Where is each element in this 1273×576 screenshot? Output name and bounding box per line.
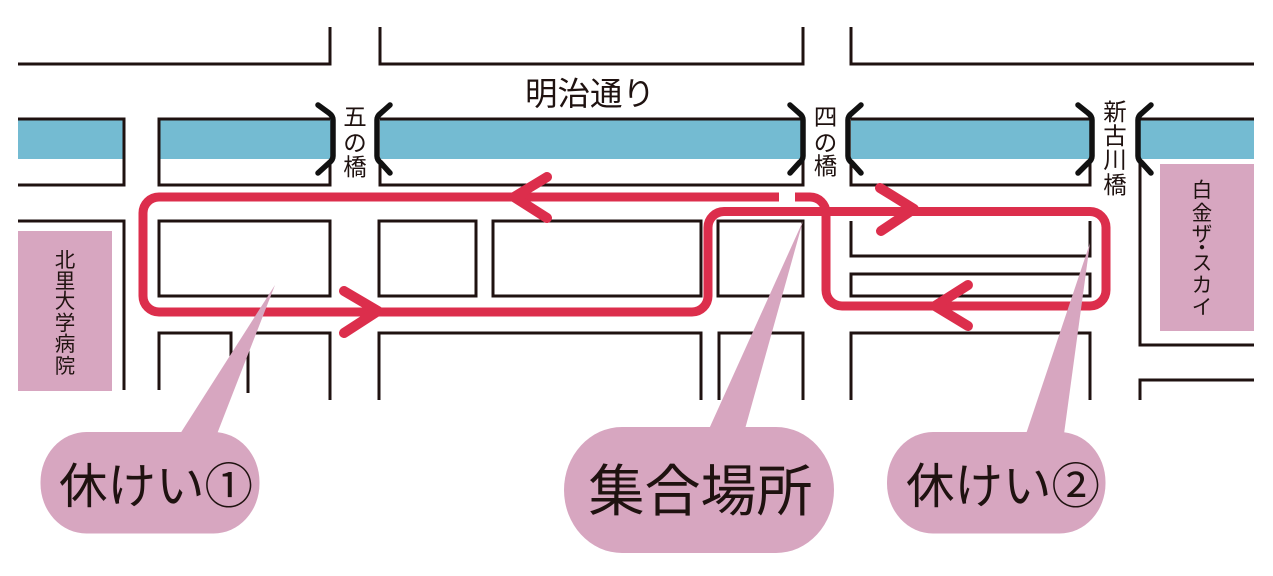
building: Shirokane The Sky: [1160, 164, 1254, 331]
bridge label: Shinfurukawa-bashi: 新: [1103, 99, 1127, 125]
building: Kitasato University Hospital: 里: [55, 270, 75, 293]
bridge label: Yon-no-hashi: の: [814, 130, 837, 156]
walking route: [143, 177, 1106, 333]
bridge label: Shinfurukawa-bashi: 川: [1103, 147, 1127, 173]
bridge label: Go-no-hashi: 橋: [343, 154, 367, 180]
building: Kitasato University Hospital: 北: [55, 249, 75, 272]
arrow: east 2: [880, 188, 914, 231]
building: Shirokane The Sky: ス: [1192, 252, 1212, 275]
bridge label: Yon-no-hashi: [814, 104, 837, 179]
building: Kitasato University Hospital: 病: [55, 333, 75, 356]
building: Shirokane The Sky: ザ: [1192, 223, 1212, 246]
arrow: east: [344, 291, 378, 333]
callout: meeting place: [564, 221, 834, 553]
callout: rest 2: [887, 243, 1106, 534]
road label: Meiji-dori: 明治通り: [525, 76, 655, 112]
bridge label: Yon-no-hashi: 橋: [814, 153, 837, 179]
river: [18, 119, 1254, 159]
callout: meeting place: 集合場所: [588, 460, 812, 523]
arrow: west: [514, 177, 547, 218]
callout: rest 2: 休けい②: [906, 460, 1100, 514]
street blocks: [18, 27, 1254, 400]
bridge label: Go-no-hashi: の: [343, 130, 367, 156]
bridge brackets: [318, 105, 1151, 173]
building: Shirokane The Sky: カ: [1192, 274, 1212, 297]
bridge label: Go-no-hashi: 五: [343, 104, 367, 130]
arrow: west 2: [935, 285, 968, 326]
bridge label: Shinfurukawa-bashi: [1103, 99, 1127, 198]
building: Kitasato University Hospital: 大: [55, 290, 75, 313]
callout: rest 1: 休けい①: [59, 460, 253, 514]
building: Kitasato University Hospital: 院: [55, 355, 75, 378]
building: Kitasato University Hospital: [18, 231, 112, 391]
bridge label: Shinfurukawa-bashi: 橋: [1103, 172, 1127, 198]
bridge label: Shinfurukawa-bashi: 古: [1103, 123, 1127, 149]
building: Shirokane The Sky: 白: [1192, 179, 1212, 202]
building: Shirokane The Sky: 金: [1192, 202, 1212, 225]
building: Shirokane The Sky: ・: [1192, 237, 1212, 260]
bridge label: Go-no-hashi: [343, 104, 367, 180]
callout: rest 1: [40, 285, 275, 534]
building: Shirokane The Sky: イ: [1192, 296, 1212, 319]
building: Kitasato University Hospital: 学: [55, 312, 75, 335]
bridge label: Yon-no-hashi: 四: [814, 104, 837, 130]
